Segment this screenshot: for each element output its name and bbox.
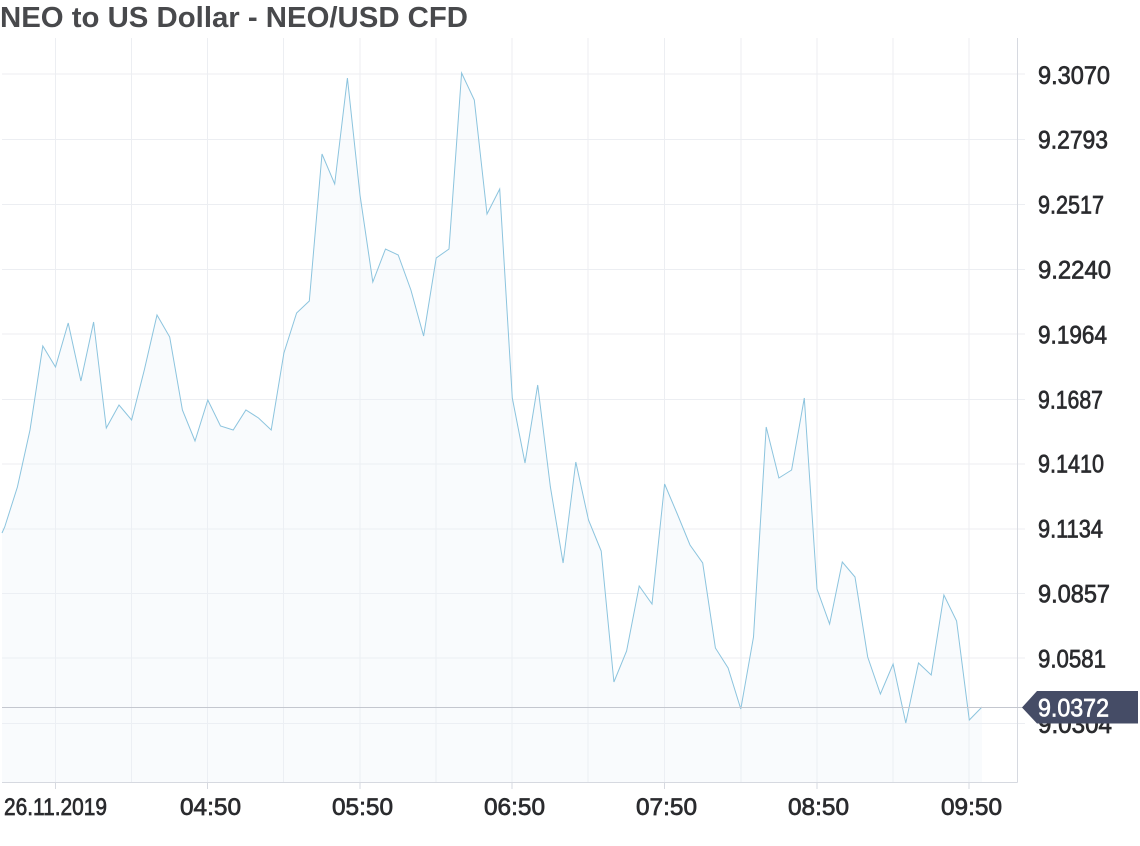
title: NEO to US Dollar - NEO/USD CFD [0,2,468,34]
price line [2,73,982,723]
x axis labels: 08:50 [788,794,849,821]
current price tag: 9.0372 [1038,694,1109,722]
x axis labels: 09:50 [941,794,1002,821]
x axis labels [4,794,1002,821]
y axis labels: 9.1410 [1038,450,1104,478]
current price tag [1022,691,1138,724]
y axis labels: 9.0857 [1038,580,1110,608]
x axis labels: 07:50 [636,794,697,821]
x axis labels: 04:50 [180,794,241,821]
x axis labels: 05:50 [332,794,393,821]
y axis labels: 9.1687 [1038,386,1103,414]
y axis labels: 9.2793 [1038,126,1108,154]
current price line [2,706,1024,708]
y axis labels: 9.0581 [1038,646,1106,674]
y axis labels: 9.2517 [1038,192,1104,220]
y axis labels: 9.0304 [1038,711,1112,739]
y axis labels [1038,62,1112,739]
y axis labels: 9.1134 [1038,516,1103,544]
area fill [2,73,982,782]
y axis labels: 9.1964 [1038,322,1107,350]
y axis labels: 9.2240 [1038,256,1111,284]
x axis labels: 26.11.2019 [4,794,107,821]
y axis labels: 9.3070 [1038,62,1110,90]
x axis labels: 06:50 [484,794,545,821]
area chart: NEO/USD price [2,73,982,782]
